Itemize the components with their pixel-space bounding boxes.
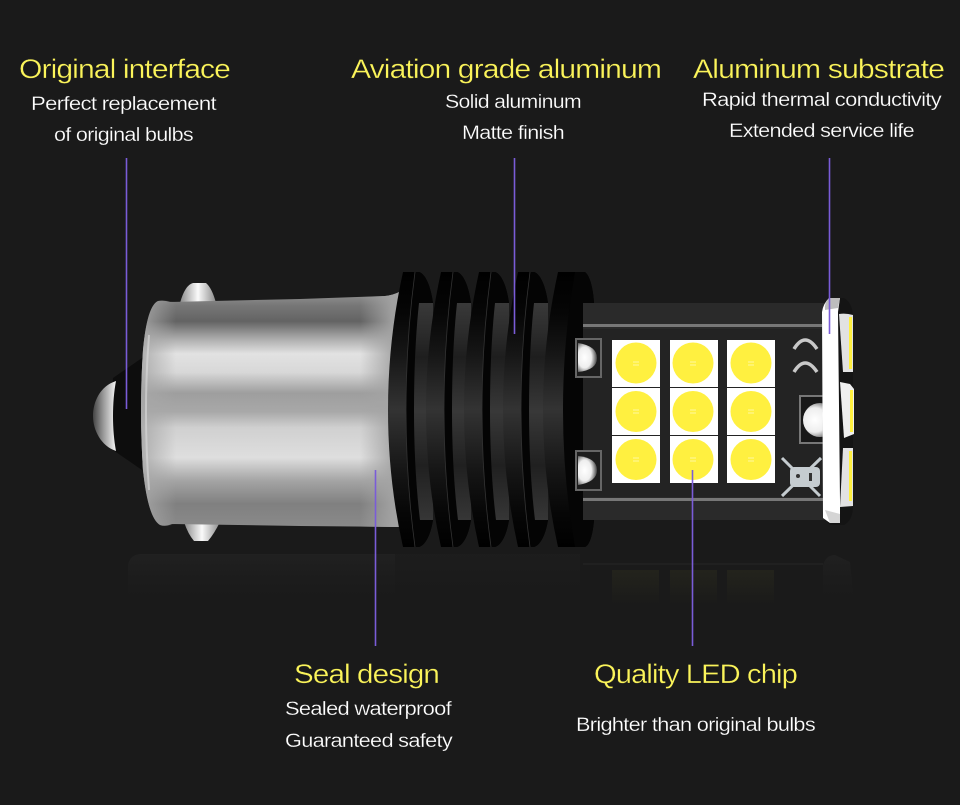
callout: aluminum substrate: Aluminum substrate — [693, 54, 944, 84]
callout: quality LED chip: Quality LED chip — [594, 659, 797, 689]
bulb illustration — [93, 272, 854, 547]
callout: original interface: Original interface — [19, 54, 230, 84]
callout: quality LED chip — [576, 659, 815, 736]
callout: original interface — [19, 54, 230, 146]
callout: original interface: of original bulbs — [54, 125, 193, 146]
callout: original interface: Perfect replacement — [31, 94, 218, 115]
callout: aviation grade aluminum — [351, 54, 661, 144]
callout: seal design — [285, 659, 453, 752]
leader lines — [126, 158, 830, 646]
LED chip grid — [612, 340, 775, 483]
callout: aviation grade aluminum: Matte finish — [462, 123, 564, 144]
callout: aluminum substrate: Rapid thermal conductivity — [702, 90, 942, 111]
callout: aviation grade aluminum: Aviation grade aluminum — [351, 54, 661, 84]
callout: aluminum substrate: Extended service life — [729, 121, 914, 142]
reflection under bulb — [128, 554, 855, 610]
callout: seal design: Seal design — [294, 659, 439, 689]
icon: side terminals — [576, 339, 601, 490]
callout: seal design: Sealed waterproof — [285, 699, 453, 720]
callout: seal design: Guaranteed safety — [285, 731, 453, 752]
metal base — [141, 291, 401, 527]
icon: contact tip — [93, 358, 142, 470]
callout: aviation grade aluminum: Solid aluminum — [445, 92, 581, 113]
side LEDs — [839, 314, 854, 507]
aluminum heat sink fins — [388, 272, 594, 547]
callout: quality LED chip: Brighter than original bulbs — [576, 715, 815, 736]
icon: board marks — [782, 340, 837, 496]
icon: locating pins — [180, 283, 220, 541]
LED circuit board — [576, 303, 837, 520]
aluminum substrate strip — [822, 298, 854, 525]
callout: aluminum substrate — [693, 54, 944, 142]
